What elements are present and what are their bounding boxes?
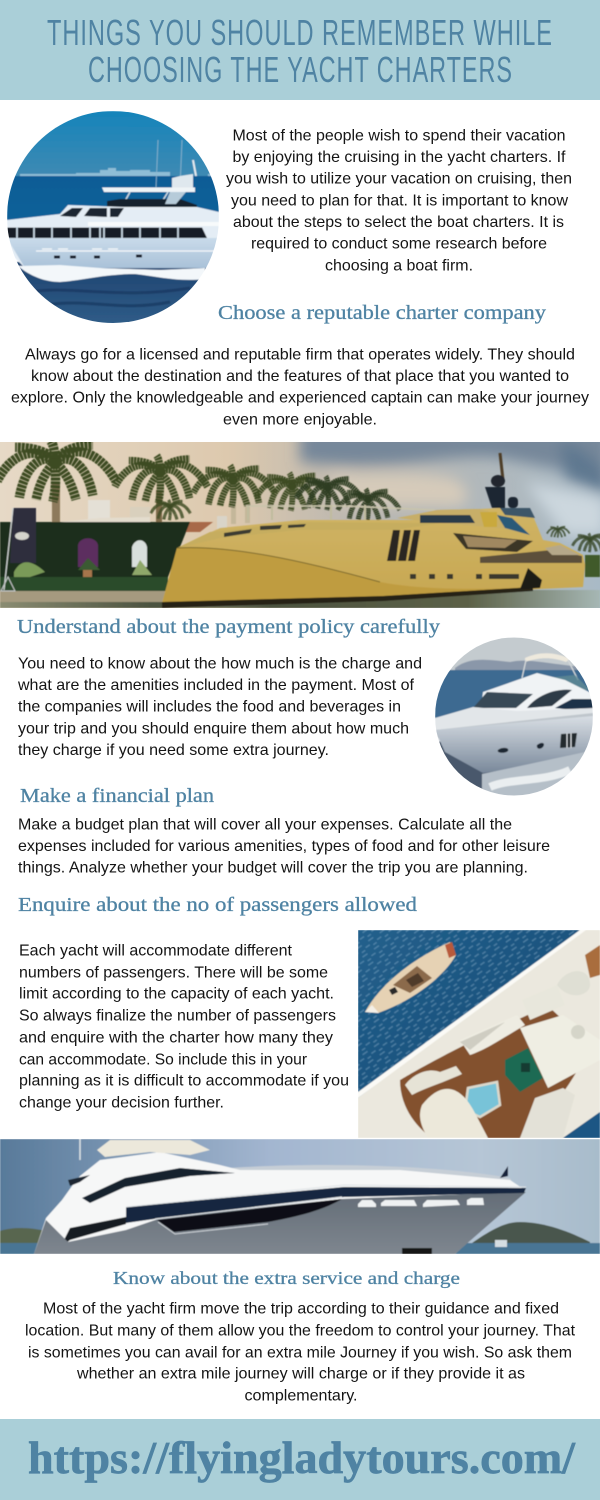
intro paragraph: Most of the people wish to spend their vacation <box>232 128 566 144</box>
extra service paragraph: location. But many of them allow you the freedom to control your journey. That <box>25 1322 576 1340</box>
extra service paragraph <box>25 1300 576 1404</box>
payment policy paragraph: your trip and you should enquire them about how much <box>18 720 409 738</box>
passengers paragraph: change your decision further. <box>19 1094 224 1112</box>
passengers paragraph: and enquire with the charter how many they <box>19 1030 333 1046</box>
payment policy paragraph <box>17 656 422 759</box>
photo: aerial view of yacht deck <box>358 930 600 1138</box>
financial plan paragraph <box>18 816 550 876</box>
extra service paragraph: Most of the yacht firm move the trip according to their guidance and fixed <box>43 1300 559 1318</box>
intro paragraph: you need to plan for that. It is important to know <box>231 192 568 210</box>
reputable company paragraph: Always go for a licensed and reputable firm that operates widely. They should <box>25 346 575 364</box>
payment policy paragraph: You need to know about the how much is the charge and <box>18 656 422 672</box>
heading: understand about the payment policy: Understand about the payment policy carefully <box>17 616 440 638</box>
heading: choose a reputable charter company: Choose a reputable charter company <box>218 302 546 324</box>
passengers paragraph <box>19 942 349 1112</box>
intro paragraph: choosing a boat firm. <box>325 258 473 274</box>
heading: know about the extra service: Know about the extra service and charge <box>113 1268 460 1288</box>
footer banner with website url: https://flyingladytours.com/ <box>28 1432 576 1483</box>
photo: white yacht in circle <box>7 111 219 324</box>
passengers paragraph: Each yacht will accommodate different <box>19 942 293 960</box>
passengers paragraph: So always finalize the number of passengers <box>19 1008 336 1024</box>
photo: white and navy superyacht <box>0 1139 600 1254</box>
passengers paragraph: can accommodate. So include this in your <box>19 1052 308 1068</box>
intro paragraph: about the steps to select the boat charters. It is <box>233 214 564 231</box>
title banner <box>0 0 600 100</box>
photo: gold yacht with palms <box>0 430 600 608</box>
payment policy paragraph: the companies will includes the food and beverages in <box>18 698 401 716</box>
extra service paragraph: is sometimes you can avail for an extra mile Journey if you wish. So ask them <box>28 1344 572 1362</box>
heading: make a financial plan: Make a financial plan <box>20 785 214 807</box>
reputable company paragraph: explore. Only the knowledgeable and experienced captain can make your journey <box>11 390 589 406</box>
intro paragraph <box>226 128 572 274</box>
extra service paragraph: complementary. <box>244 1388 358 1404</box>
passengers paragraph: limit according to the capacity of each yacht. <box>19 986 334 1002</box>
building behind hedge <box>60 500 227 532</box>
extra service paragraph: whether an extra mile journey will charge or if they provide it as <box>76 1366 525 1382</box>
footer banner with website url <box>0 1419 600 1500</box>
reputable company paragraph <box>11 346 589 428</box>
intro paragraph: you wish to utilize your vacation on cruising, then <box>226 170 572 188</box>
photo: motor yacht in circle <box>435 637 593 800</box>
financial plan paragraph: Make a budget plan that will cover all your expenses. Calculate all the <box>18 816 512 834</box>
passengers paragraph: numbers of passengers. There will be some <box>19 964 328 982</box>
heading: enquire about passengers: Enquire about the no of passengers allowed <box>18 894 417 916</box>
passengers paragraph: planning as it is difficult to accommodate if you <box>19 1072 349 1090</box>
financial plan paragraph: expenses included for various amenities, types of food and for other leisure <box>18 838 550 855</box>
payment policy paragraph: they charge if you need some extra journey. <box>18 742 329 759</box>
intro paragraph: by enjoying the cruising in the yacht charters. If <box>232 149 566 166</box>
payment policy paragraph: what are the amenities included in the payment. Most of <box>17 677 415 694</box>
reputable company paragraph: know about the destination and the features of that place that you wanted to <box>31 368 569 385</box>
intro paragraph: required to conduct some research before <box>251 236 547 252</box>
reputable company paragraph: even more enjoyable. <box>223 412 377 428</box>
financial plan paragraph: things. Analyze whether your budget will cover the trip you are planning. <box>18 860 528 876</box>
